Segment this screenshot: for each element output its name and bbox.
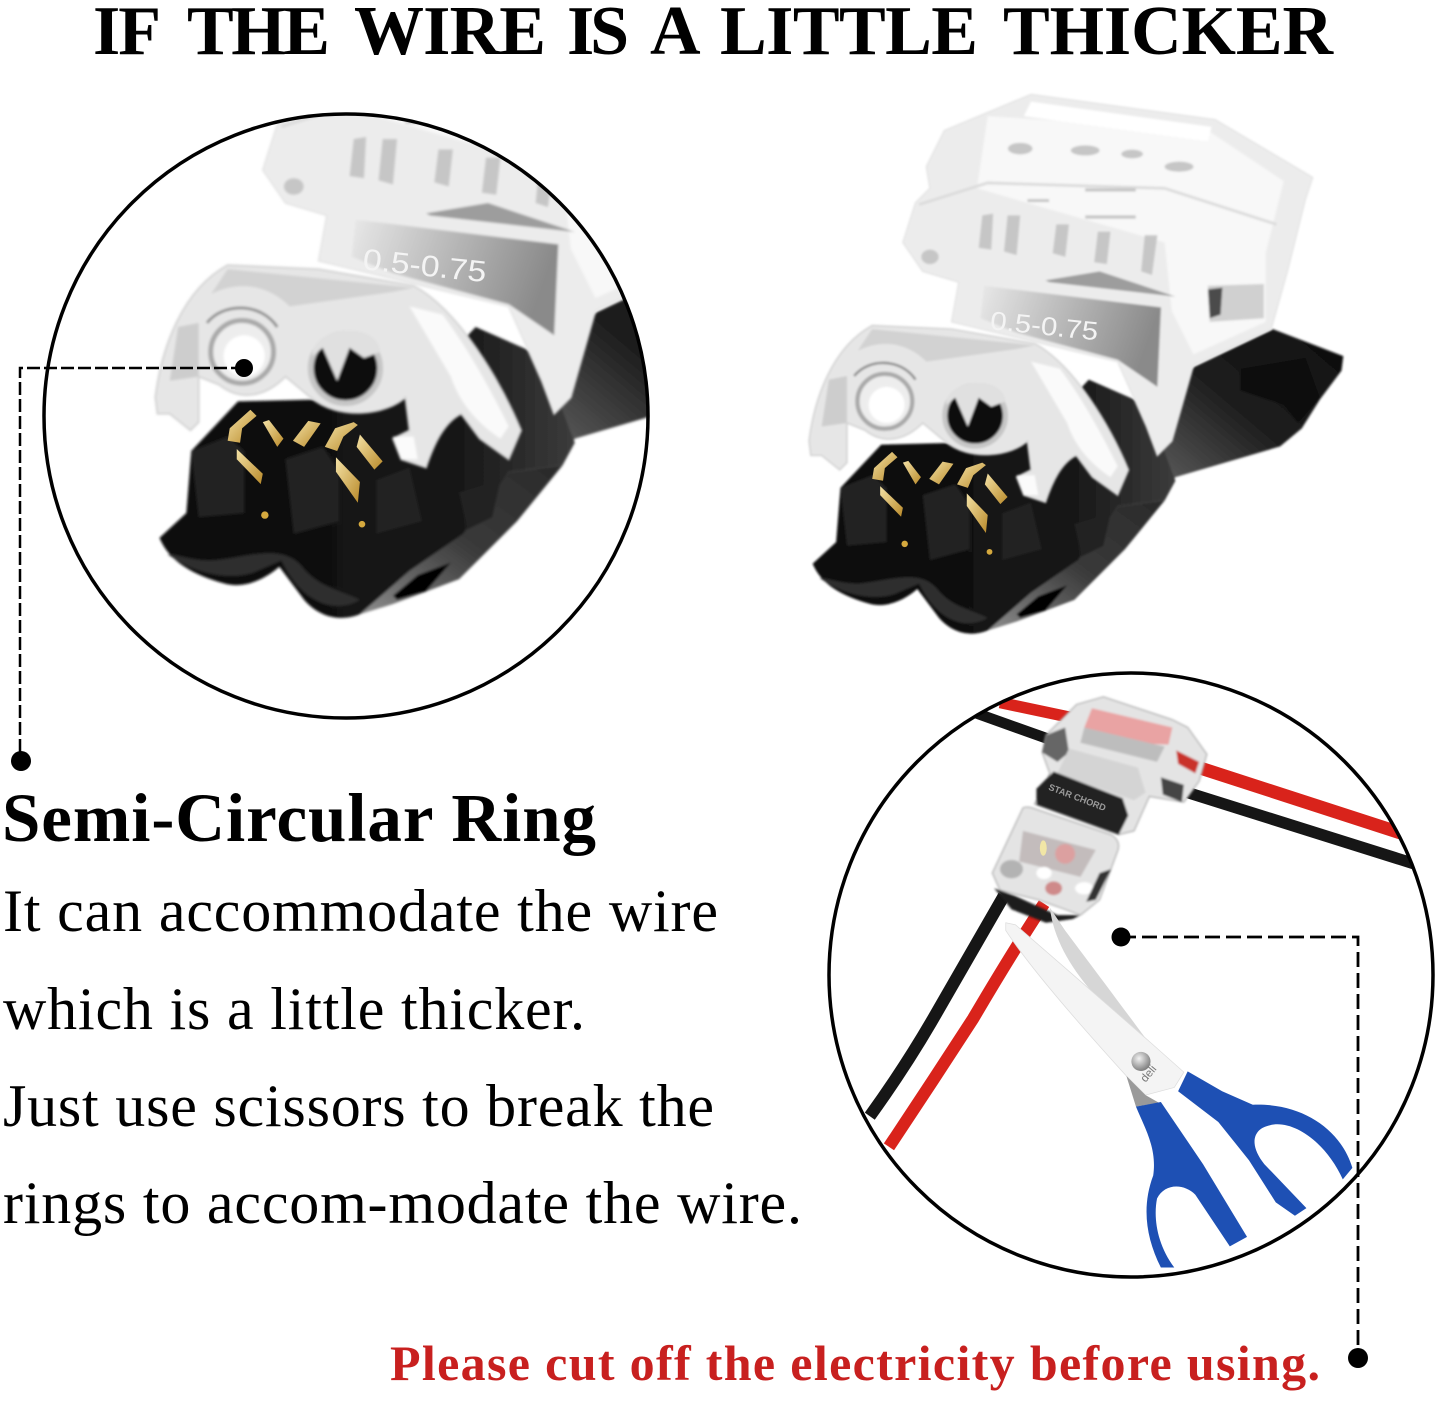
- T connector: [992, 697, 1207, 923]
- description text: It can accommodate the wire: [3, 878, 718, 944]
- description text: rings to accom-modate the wire.: [3, 1170, 802, 1236]
- magnified connector circle: [42, 112, 650, 720]
- product connector: [809, 94, 1343, 634]
- red and black wires: [870, 703, 1425, 1147]
- heading: semi-circular ring: Semi-Circular Ring: [2, 780, 596, 856]
- description text: which is a little thicker.: [3, 976, 585, 1042]
- wiring demonstration circle: STAR CHORD: [1047, 782, 1108, 813]
- description text: Just use scissors to break the: [3, 1073, 714, 1139]
- title: [93, 0, 1334, 70]
- scissors: [1006, 907, 1352, 1267]
- warning text: Please cut off the electricity before using.: [390, 1335, 1320, 1391]
- connector close-up photo: [154, 116, 646, 620]
- wiring demonstration circle: [829, 673, 1433, 1277]
- callout: warning leader: [1112, 928, 1368, 1368]
- description text: [3, 878, 802, 1236]
- scissors: deli: [1139, 1063, 1159, 1085]
- callout: semi-circular ring leader: [11, 359, 253, 771]
